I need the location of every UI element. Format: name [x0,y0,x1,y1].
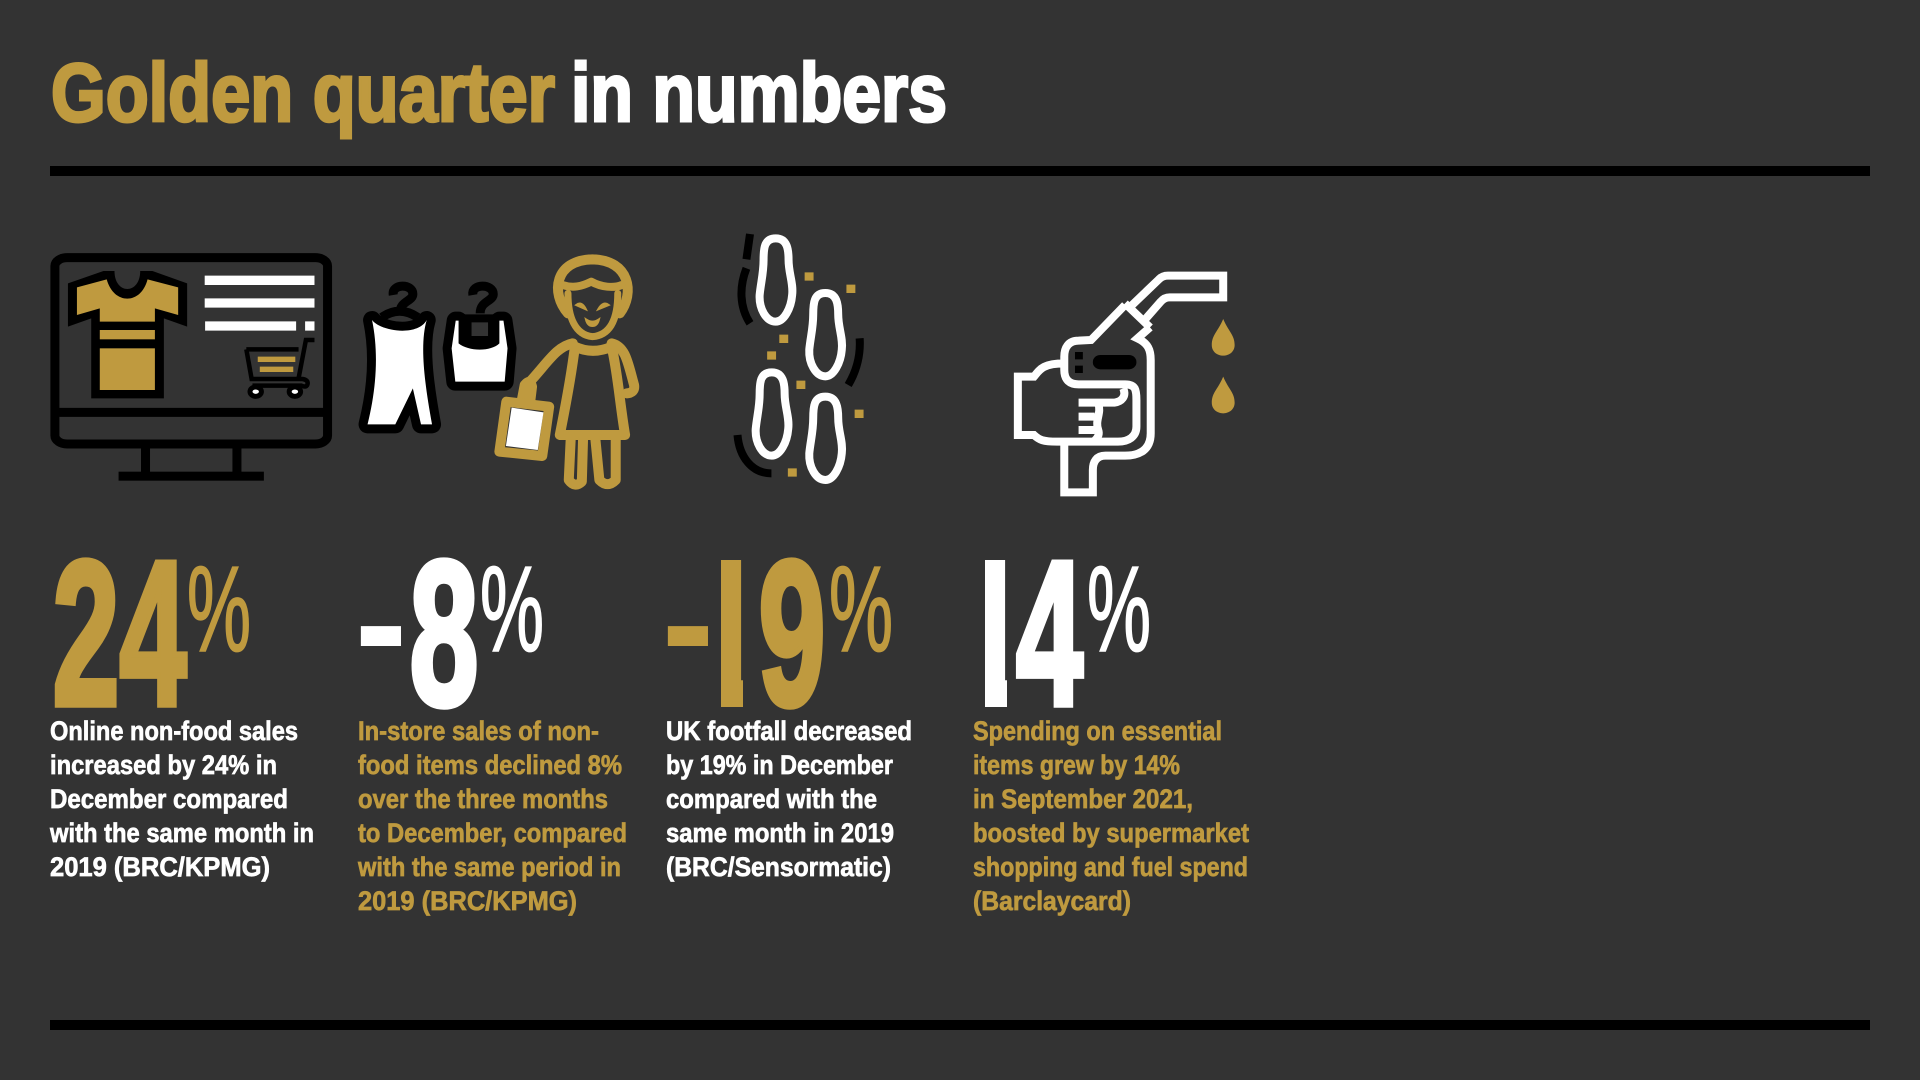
big number: 14%: 1 [953,518,1028,748]
big number: 14%: 4 [1016,518,1083,748]
big number: -8%: 8 [410,518,478,748]
text: online non-food sales: increased by 24% in [50,750,277,780]
top rule [50,166,1870,176]
icon: footprints [737,234,864,480]
big number: -8%: - [356,539,406,707]
text: in-store sales: food items declined 8% [358,750,622,780]
title: in numbers [571,46,947,139]
text: in-store sales: with the same period in [357,852,621,882]
text: essential spending: Spending on essential [973,716,1222,746]
text: online non-food sales [49,716,314,882]
big number: 14% [985,560,1149,708]
text: online non-food sales: Online non-food sales [50,716,298,746]
big number: -8%: % [480,541,544,677]
big number: -19%: 1 [689,518,764,748]
panel: online sales [49,258,328,882]
text: online non-food sales: 2019 (BRC/KPMG) [50,852,270,882]
big number: 14%: % [1087,541,1151,677]
big number: -19%: % [829,541,893,677]
panel: UK footfall [663,234,912,882]
text: online non-food sales: with the same month in [49,818,314,848]
icon: monitor with shirt and cart [55,258,328,481]
icon: hanging clothes and shopper [368,259,634,485]
text: in-store sales: over the three months [358,784,608,814]
text: online non-food sales: December compared [50,784,288,814]
title: Golden quarter [51,46,555,139]
big number: 24%: % [187,541,251,677]
text: essential spending: items grew by 14% [973,750,1180,780]
text: in-store sales [357,716,627,916]
big number: -8% [356,518,544,748]
text: essential spending: in September 2021, [973,784,1193,814]
big number: 24%: 24 [52,518,186,748]
text: UK footfall: compared with the [666,784,877,814]
panel: essential spending [953,276,1249,916]
text: UK footfall: (BRC/Sensormatic) [666,852,891,882]
panel: in-store sales [356,259,634,916]
big number: -19%: - [663,539,713,707]
bottom rule [50,1020,1870,1030]
text: in-store sales: In-store sales of non- [358,716,599,746]
text: essential spending: shopping and fuel spend [973,852,1248,882]
big number: -19% [668,557,891,710]
text: UK footfall [666,716,912,882]
text: essential spending [973,716,1249,916]
text: in-store sales: 2019 (BRC/KPMG) [358,886,577,916]
text: UK footfall: by 19% in December [666,750,893,780]
title [51,46,947,139]
text: essential spending: boosted by supermarket [973,818,1249,848]
text: UK footfall: same month in 2019 [666,818,894,848]
text: essential spending: (Barclaycard) [973,886,1131,916]
text: UK footfall: UK footfall decreased [666,716,912,746]
big number: -19%: 9 [758,518,826,748]
text: in-store sales: to December, compared [358,818,627,848]
icon: fuel nozzle and drops [1018,276,1235,492]
